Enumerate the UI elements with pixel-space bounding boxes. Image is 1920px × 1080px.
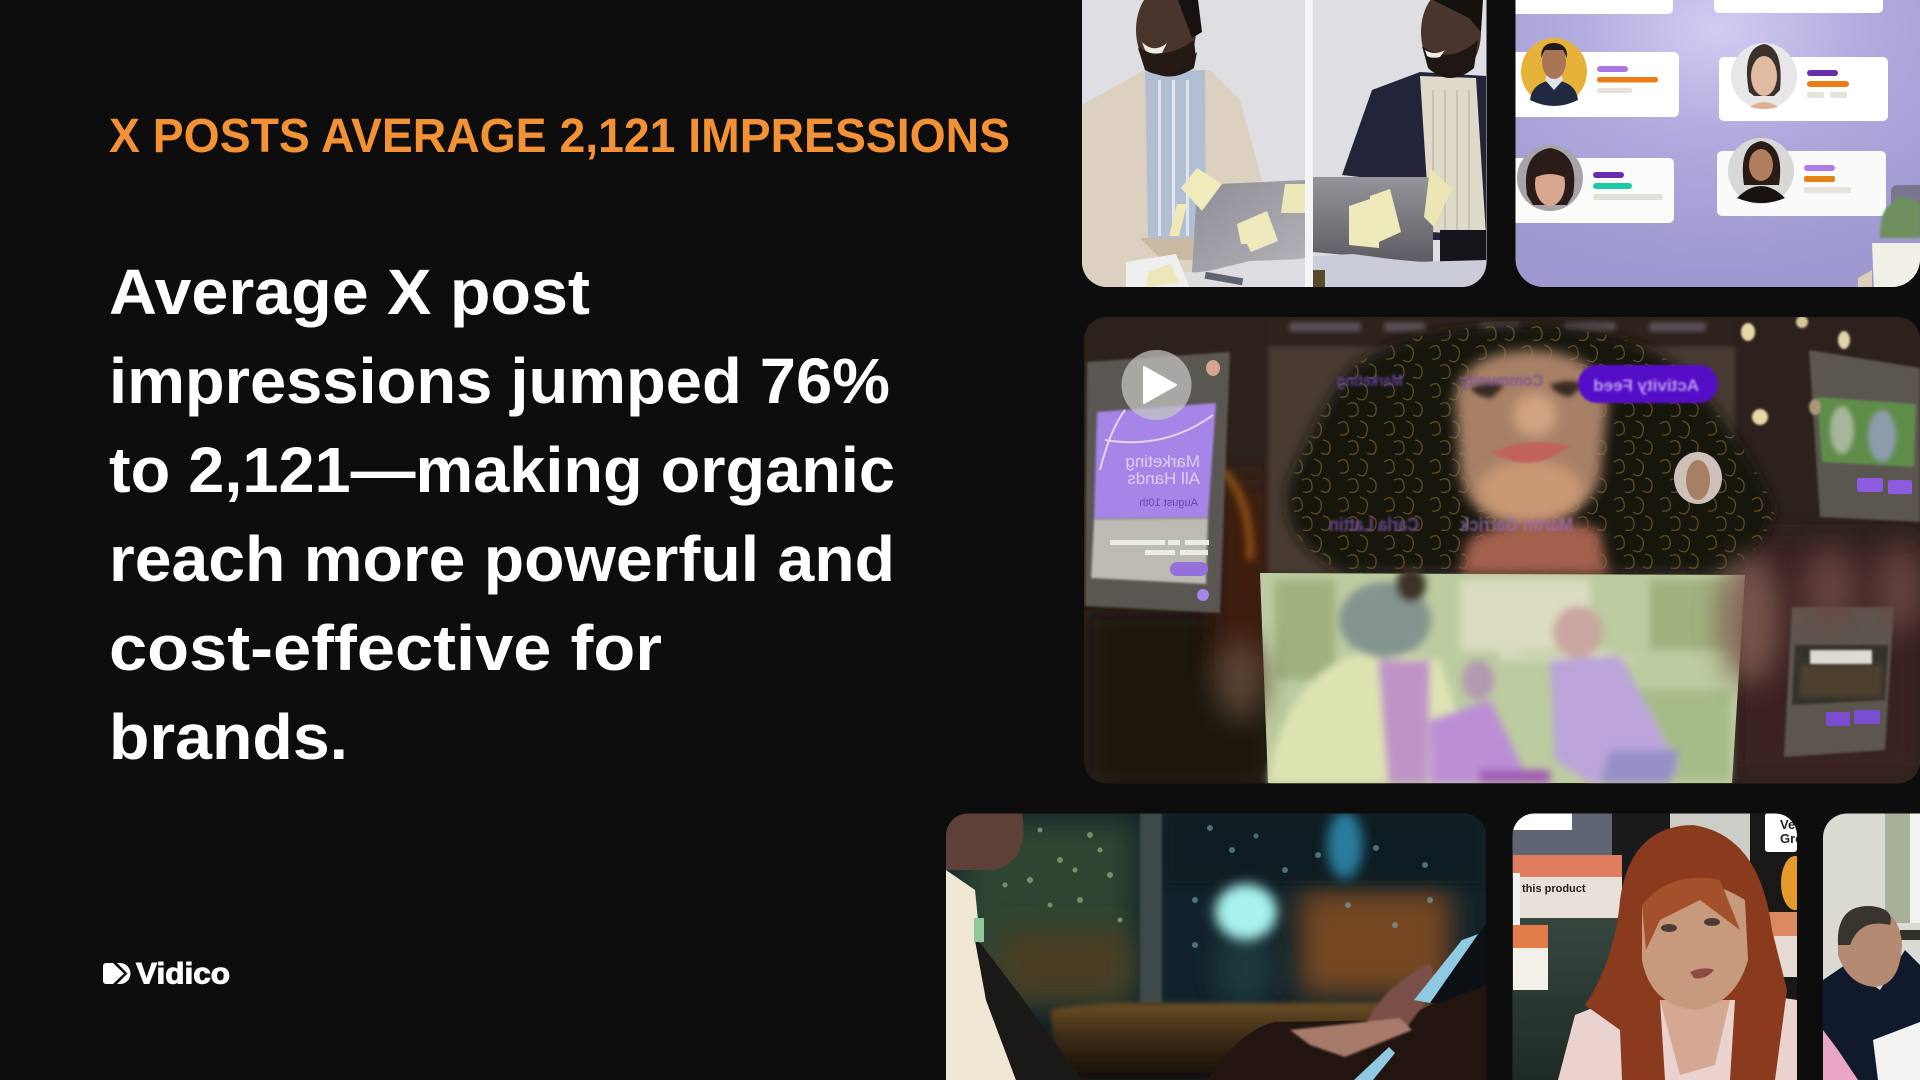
reflected interface labels: Martin Garrick xyxy=(1460,515,1573,536)
pill: activity feed xyxy=(1578,365,1718,403)
panel: man in hoodie reading document xyxy=(1823,813,1920,1080)
table surface xyxy=(1050,1003,1486,1080)
potted plant xyxy=(1858,185,1920,293)
pink shoulder xyxy=(1823,1030,1858,1080)
panel: two men with laptops xyxy=(1082,0,1487,290)
man in navy hoodie xyxy=(1823,906,1920,1080)
left floating event card xyxy=(1085,352,1230,613)
right floating cards xyxy=(1784,350,1920,757)
panel: video still, woman with holographic screens xyxy=(1084,316,1920,790)
rainy window with bokeh xyxy=(960,811,1485,1008)
reflected interface labels: Marketing xyxy=(1337,371,1403,390)
logo: Vidico xyxy=(103,958,230,990)
card: woman with fringe xyxy=(1505,145,1674,223)
reflected interface labels: Community xyxy=(1460,371,1543,390)
card: woman smiling xyxy=(1719,43,1888,121)
pill: activity feed: Activity Feed xyxy=(1593,376,1699,395)
review cards: this product xyxy=(1522,883,1586,895)
window pillar xyxy=(1140,813,1162,1003)
woman with curly hair xyxy=(1287,325,1775,575)
main statement text: brands. xyxy=(109,701,348,773)
right man xyxy=(1342,0,1486,268)
hands holding phone xyxy=(1207,963,1486,1080)
left laptop and sticky notes xyxy=(1126,168,1305,288)
main statement text: impressions jumped 76% xyxy=(109,345,890,417)
phone xyxy=(1354,925,1486,1080)
top cropped cards xyxy=(1505,0,1883,14)
main statement text: Average X post xyxy=(109,256,590,328)
left floating event card: August 10th xyxy=(1139,497,1198,509)
card: woman with dark hair xyxy=(1717,138,1886,216)
centre interface screen xyxy=(1268,317,1735,573)
panel: red-haired woman with review cards xyxy=(1512,813,1809,1080)
reflected interface labels: Carla Lattin xyxy=(1329,515,1419,536)
lower park photo on screen xyxy=(1260,568,1745,783)
dark lower left and blurred background xyxy=(1084,470,1920,790)
main statement text: cost-effective for xyxy=(109,612,662,684)
left floating event card: Marketing xyxy=(1125,452,1200,471)
play button xyxy=(1122,350,1192,420)
wordmark: Vidico xyxy=(136,958,230,990)
window and wall xyxy=(1885,813,1920,940)
heading: orange kicker: X POSTS AVERAGE 2,121 IMPRESSIONS xyxy=(109,110,1010,163)
card: man on yellow xyxy=(1505,38,1679,117)
review cards: Gre xyxy=(1780,831,1802,846)
person: face and suit xyxy=(946,813,1082,1080)
blurred fingers and bokeh lights xyxy=(1216,316,1920,720)
panel divider xyxy=(1305,0,1313,288)
review cards xyxy=(1513,813,1809,990)
background wall and window frames xyxy=(1512,814,1797,1000)
document xyxy=(1873,1022,1920,1080)
panel: person holding phone at rainy window xyxy=(946,811,1486,1080)
panel: purple team profile cards xyxy=(1505,0,1920,293)
review cards: Ver xyxy=(1780,817,1800,832)
main statement text xyxy=(109,256,895,773)
right laptop and sticky notes xyxy=(1313,168,1486,290)
woman xyxy=(1558,825,1797,1080)
icon: play logo mark xyxy=(103,963,130,984)
main statement text: to 2,121—making organic xyxy=(109,434,895,506)
reflected interface labels xyxy=(1328,363,1720,532)
main statement text: reach more powerful and xyxy=(109,523,895,595)
left man xyxy=(1082,0,1272,288)
left floating event card: All Hands xyxy=(1127,469,1200,488)
street light glow xyxy=(1215,884,1277,940)
